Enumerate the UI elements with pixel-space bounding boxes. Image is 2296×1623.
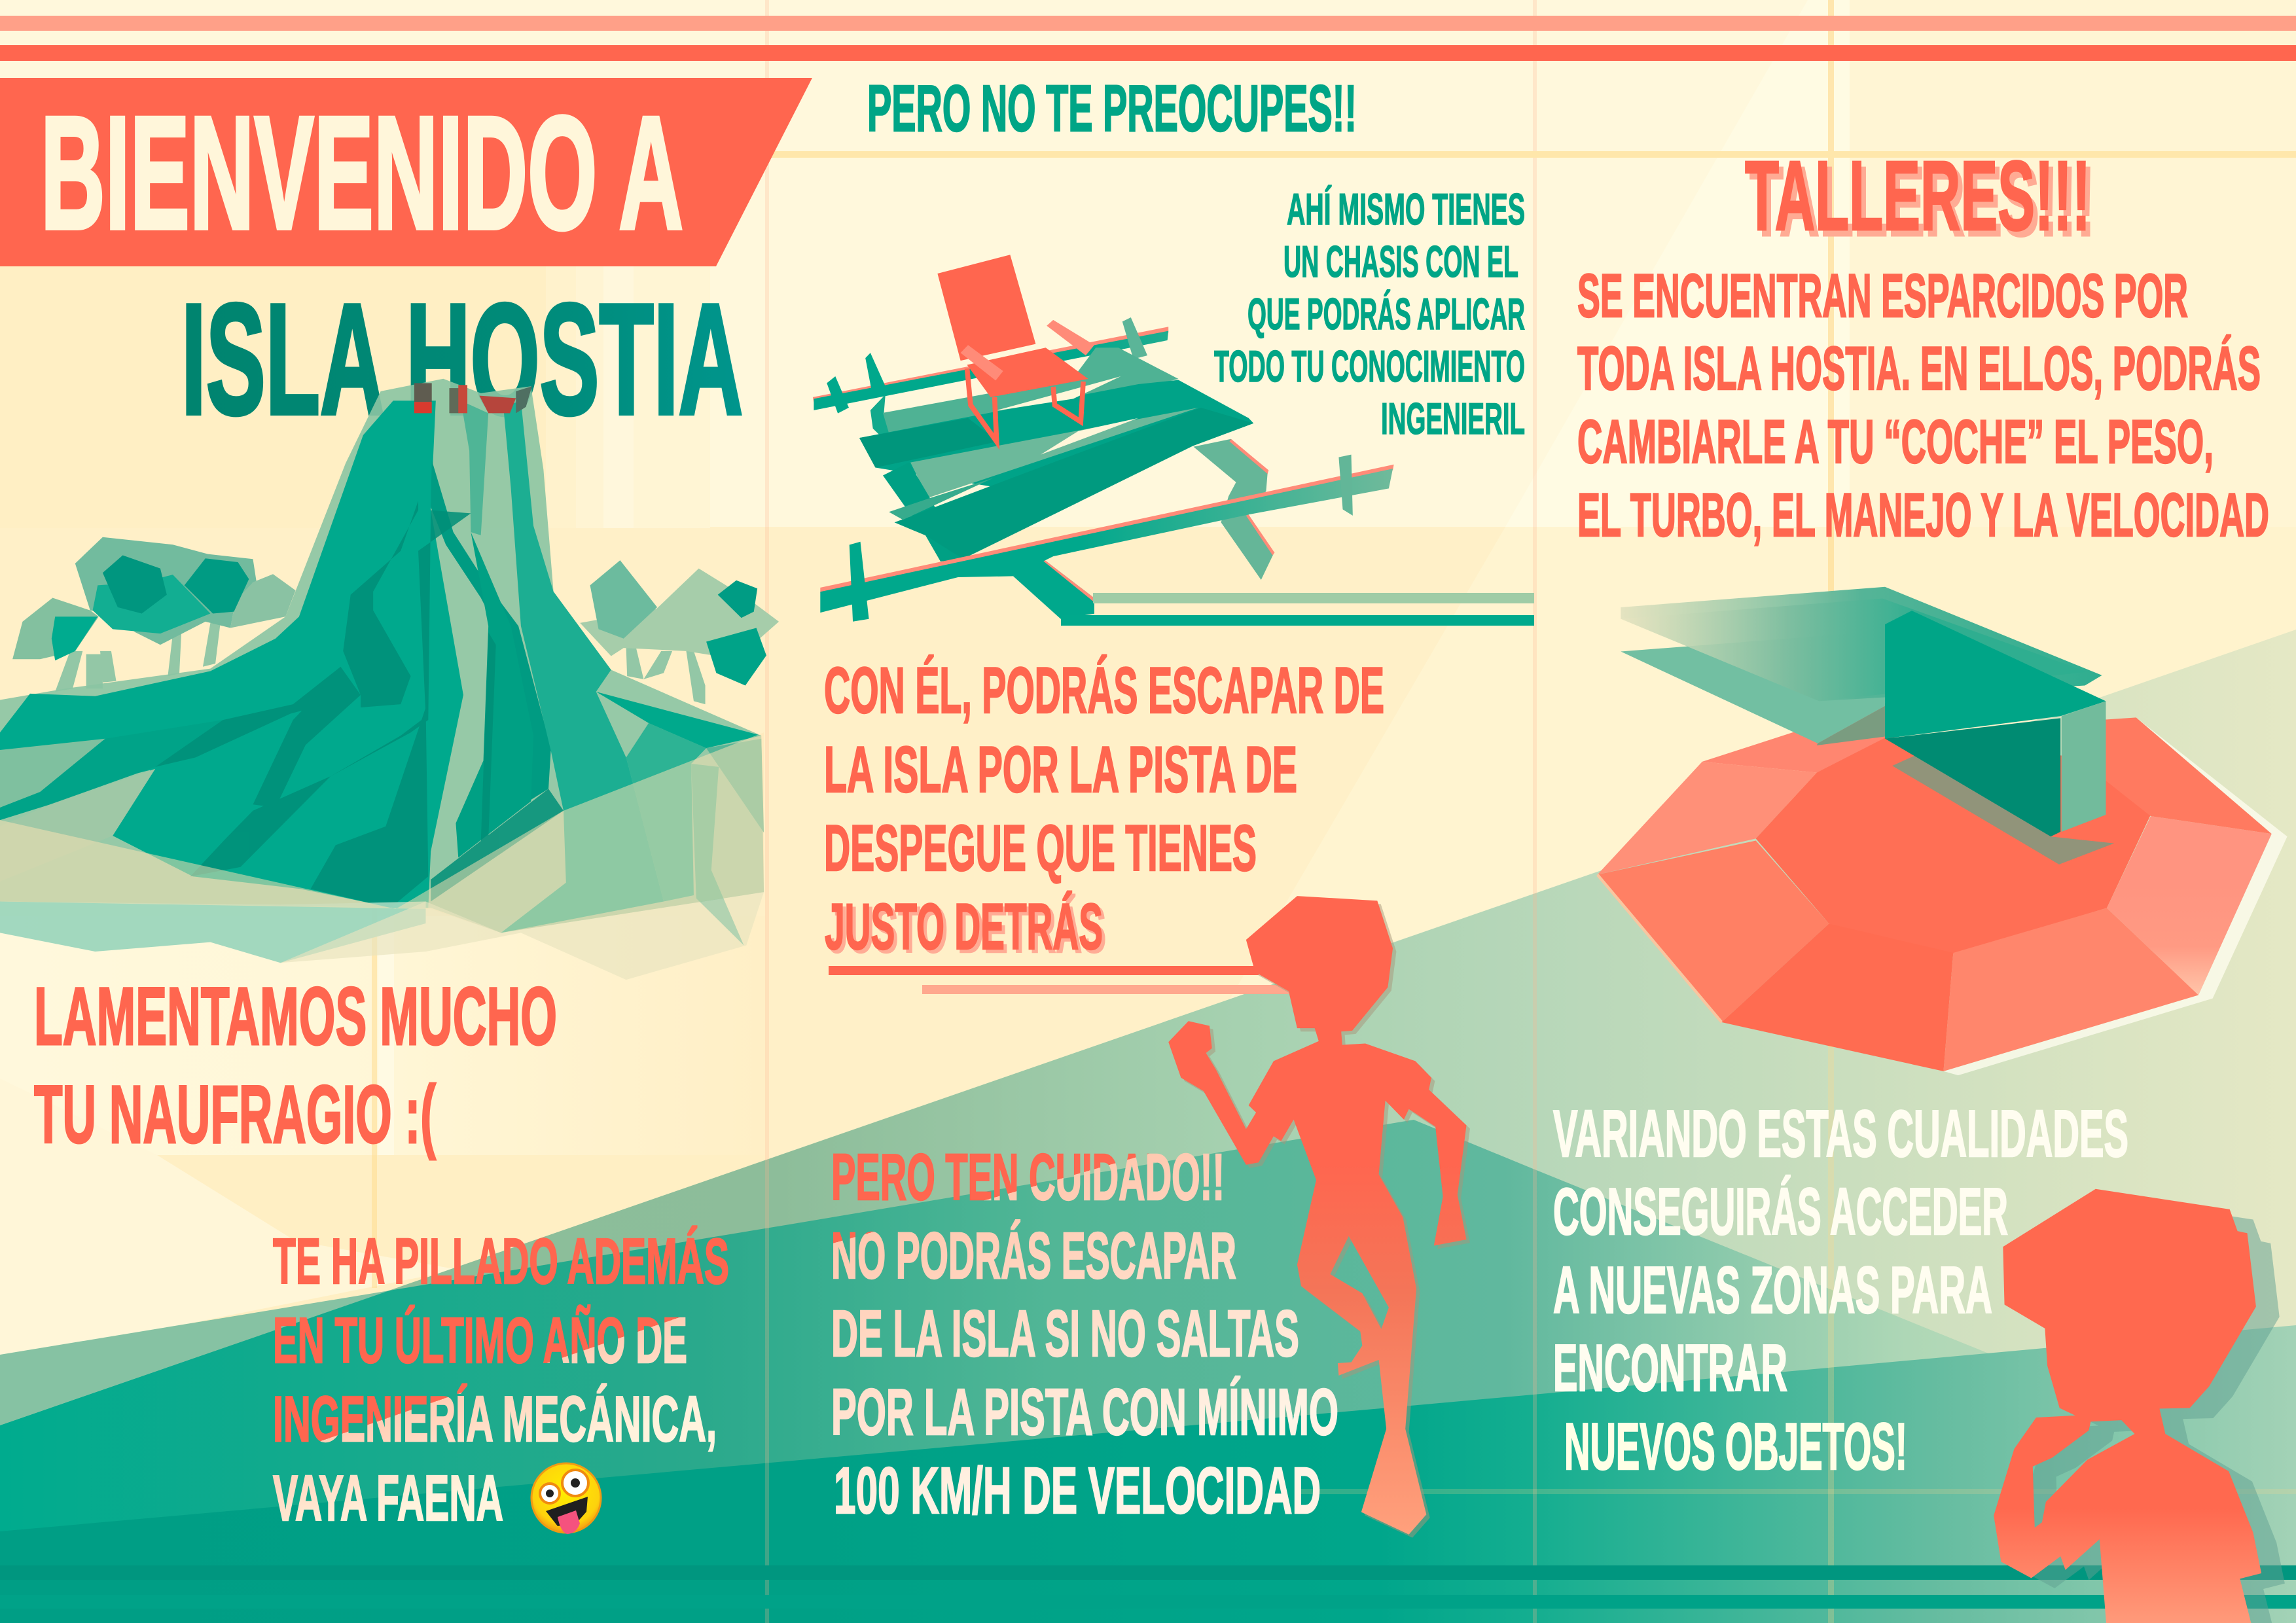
text: chasis: AHÍ MISMO TIENES <box>1287 185 1525 234</box>
mountain main body <box>0 401 764 945</box>
top stripes <box>0 16 2296 61</box>
runner body <box>1168 896 1467 1535</box>
text: chasis: TODO TU CONOCIMIENTO <box>1214 342 1525 391</box>
underline bars <box>829 966 1289 994</box>
title banner <box>0 78 812 266</box>
text: escapar: LA ISLA POR LA PISTA DE <box>824 733 1297 806</box>
text: cuidado <box>831 1141 1338 1527</box>
ground: front teal slope <box>0 1325 2296 1623</box>
text: chasis: INGENIERIL <box>1381 394 1525 444</box>
text: ingenieria: INGENIERÍA MECÁNICA, <box>273 1383 717 1455</box>
bottom stripes <box>0 1565 2296 1609</box>
lower translucent ground <box>281 892 764 980</box>
text: chasis <box>1214 185 1525 444</box>
character: running figure <box>1168 896 1470 1538</box>
text: ingenieria: EN TU ÚLTIMO AÑO DE <box>273 1304 687 1376</box>
heading: talleres <box>1745 140 2095 257</box>
ground: mid teal slope <box>0 1120 2296 1623</box>
text: lamentamos: LAMENTAMOS MUCHO <box>34 971 557 1062</box>
illustration: volcano island <box>0 379 779 980</box>
text: ingenieria: TE HA PILLADO ADEMÁS <box>273 1225 729 1297</box>
platform edge highlight <box>1943 717 2287 1075</box>
block shadow <box>1892 753 2114 865</box>
text: escapar: JUSTO DETRÁS <box>825 890 1103 963</box>
block <box>1885 611 2106 836</box>
text: cuidado: 100 KM/H DE VELOCIDAD <box>834 1454 1321 1527</box>
chassis back axle <box>813 317 1168 414</box>
thinker shadow <box>2017 1199 2285 1623</box>
text: lamentamos: TU NAUFRAGIO :( <box>34 1069 436 1160</box>
base light band <box>0 902 426 963</box>
illustration: workshop platform <box>1598 587 2287 1075</box>
trees left <box>12 537 296 692</box>
chassis upper plate <box>883 348 1179 447</box>
text: cualidades: NUEVOS OBJETOS! <box>1564 1410 1907 1484</box>
text: talleres body <box>1577 261 2269 549</box>
text: cuidado: POR LA PISTA CON MÍNIMO <box>831 1376 1338 1449</box>
runner shadow <box>1172 899 1470 1538</box>
text: escapar: CON ÉL, PODRÁS ESCAPAR DE <box>824 654 1384 726</box>
text: cualidades: ENCONTRAR <box>1553 1332 1787 1405</box>
ground: pale green slope <box>0 630 2296 1623</box>
chassis front axle <box>820 455 1394 622</box>
character: thinking figure <box>1994 1189 2285 1623</box>
text: escapar: JUSTO DETRÁS <box>828 893 1106 966</box>
icon: crazy face emoji <box>531 1463 601 1534</box>
mountain silhouette <box>0 379 764 933</box>
chassis plate dark <box>859 380 1253 488</box>
mountain ridges <box>155 501 564 908</box>
text: chasis: QUE PODRÁS APLICAR <box>1247 289 1525 339</box>
crater shadow on title <box>414 383 532 413</box>
title: bienvenido a: BIENVENIDO A <box>41 83 683 263</box>
trees right <box>580 560 779 704</box>
text: cuidado: DE LA ISLA SI NO SALTAS <box>831 1297 1299 1370</box>
chassis front plate <box>895 408 1253 559</box>
seat <box>937 255 1094 442</box>
chassis light plate <box>910 408 1198 498</box>
text: cuidado: NO PODRÁS ESCAPAR <box>831 1219 1236 1293</box>
ground: left slope wedge <box>0 1291 389 1425</box>
title: isla hostia: ISLA HOSTIA <box>181 272 743 448</box>
heading: pero no te preocupes: PERO NO TE PREOCUPES!! <box>867 72 1357 145</box>
base fog <box>0 732 764 933</box>
thinker body <box>1994 1189 2261 1623</box>
platform facets <box>1598 702 2272 1071</box>
text: lamentamos <box>34 971 557 1160</box>
text: escapar: DESPEGUE QUE TIENES <box>824 812 1257 884</box>
wing plates <box>1621 587 2102 745</box>
text: ingenieria: VAYA FAENA <box>273 1462 503 1534</box>
text: chasis: UN CHASIS CON EL <box>1283 237 1518 287</box>
text: cualidades <box>1553 1097 2128 1484</box>
text: cuidado: PERO TEN CUIDADO!! <box>831 1141 1225 1214</box>
chassis side rail <box>1193 439 1274 580</box>
chassis left post <box>870 395 903 446</box>
chassis gap <box>993 376 1121 411</box>
bars under chassis <box>1061 593 1534 626</box>
chassis rail <box>883 463 963 562</box>
illustration: chassis with seat <box>813 255 1394 622</box>
chassis front rail <box>1013 559 1094 619</box>
text: ingenieria <box>273 1225 729 1534</box>
text: escapar <box>824 654 1384 966</box>
